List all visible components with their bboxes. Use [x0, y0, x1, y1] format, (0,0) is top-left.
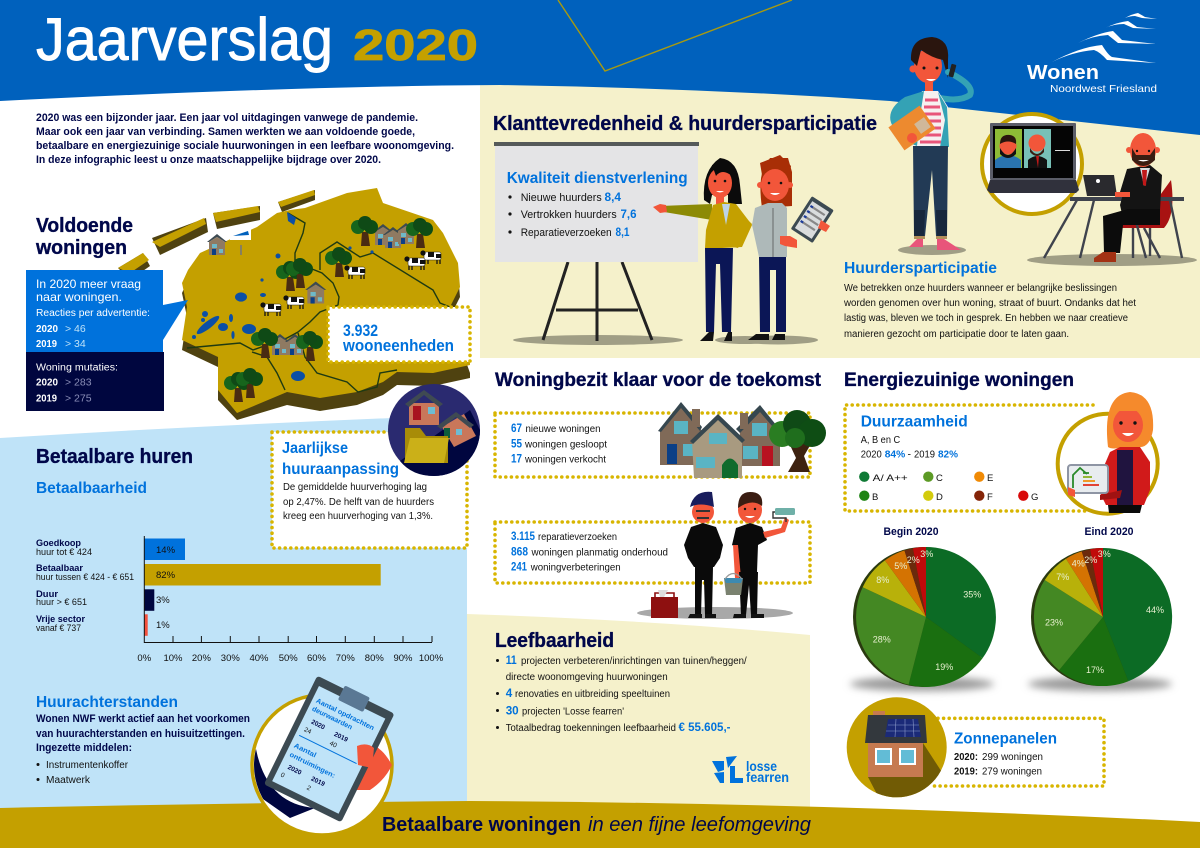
icon: house with solar panels — [846, 697, 947, 798]
bottom band: in een fijne leefomgeving — [588, 814, 811, 836]
callout: 3.932 wooneenheden: wooneenheden — [342, 336, 454, 355]
text: leefbaarheid: Leefbaarheid — [495, 630, 614, 652]
easel board: kwaliteit dienstverlening: Vertrokken huurders — [521, 209, 617, 221]
bar chart: betaalbaarheid: 10% — [163, 653, 183, 664]
text: leefbaarheid: 4 — [506, 686, 513, 700]
panel: reparaties statistieken: woningverbeteringen — [530, 562, 621, 574]
illustration: man at desk — [1027, 133, 1197, 266]
text: leefbaarheid: € 55.605,- — [678, 720, 730, 734]
text: huurdersparticipatie: manieren gezocht om participatie door te laten gaan. — [844, 329, 1069, 340]
illustration: presenting woman — [653, 158, 775, 344]
panel: reparaties statistieken: reparatieverzoeken — [538, 532, 617, 543]
text: huurdersparticipatie: We betrekken onze huurders wanneer er belangrijke beslissingen — [844, 283, 1117, 294]
pie chart: begin 2020: 3% — [920, 549, 933, 559]
bar chart: betaalbaarheid: 100% — [419, 653, 444, 664]
pie chart: eind 2020: 3% — [1098, 549, 1111, 559]
bar chart: betaalbaarheid: Duur — [36, 589, 58, 600]
panel: woningen statistieken: nieuwe woningen — [526, 424, 600, 435]
legend: energielabels: E — [987, 473, 993, 484]
header band — [0, 0, 1200, 135]
text: leefbaarheid: directe woonomgeving huurwoningen — [506, 672, 668, 683]
easel board: kwaliteit dienstverlening: Reparatieverzoeken — [521, 227, 612, 239]
bar chart: betaalbaarheid: 1% — [156, 620, 170, 631]
bar chart: betaalbaarheid — [36, 536, 444, 664]
logo: Losse fearren — [712, 756, 789, 785]
callout: meer vraag naar woningen: 2019 — [36, 339, 57, 350]
heading: Voldoende woningen — [35, 215, 133, 259]
bar chart: betaalbaarheid: Goedkoop — [36, 538, 81, 549]
clipboard: deurwaarden en ontruimingen: ontruimingen: — [288, 751, 336, 780]
panel: duurzaamheid: 84% — [885, 448, 906, 460]
clipboard: deurwaarden en ontruimingen: Aantal — [293, 743, 317, 759]
text: leefbaarheid: 30 — [506, 704, 519, 718]
bar chart: betaalbaarheid: 3% — [156, 595, 170, 606]
intro text — [36, 112, 454, 166]
bar chart: betaalbaarheid: 70% — [336, 653, 355, 664]
panel: reparaties statistieken — [495, 522, 810, 583]
easel board: kwaliteit dienstverlening: 7,6 — [620, 207, 637, 221]
bar chart: betaalbaarheid: vanaf € 737 — [36, 623, 81, 634]
callout: woning mutaties: 2020 — [36, 378, 58, 388]
bottom band: Betaalbare woningen — [382, 814, 581, 836]
pie chart: eind 2020: 17% — [1086, 665, 1104, 675]
clipboard: deurwaarden en ontruimingen: 0 — [279, 772, 286, 780]
text: huurdersparticipatie: lastig was, bleven we toch in gesprek. En hebben we naar creatieve — [844, 313, 1128, 324]
logo: Wonen Noordwest Friesland — [1027, 13, 1157, 95]
legend: energielabels: B — [872, 492, 878, 503]
callout: meer vraag naar woningen: > 46 — [65, 323, 86, 335]
panel: duurzaamheid: A, B en C — [861, 435, 900, 446]
illustration: video call laptop — [982, 114, 1082, 214]
legend: energielabels — [859, 472, 1038, 503]
clipboard: deurwaarden en ontruimingen: 2019 — [310, 775, 326, 788]
bottom band — [0, 801, 1200, 848]
bar chart: betaalbaarheid: 80% — [365, 653, 384, 664]
text: leefbaarheid — [495, 630, 747, 734]
panel: duurzaamheid: Duurzaamheid — [861, 414, 968, 431]
panel: reparaties statistieken: woningen planmatig onderhoud — [531, 548, 668, 558]
panel: zonnepanelen: 299 woningen — [982, 751, 1043, 763]
logo: Losse fearren: losse — [746, 758, 777, 774]
easel board: kwaliteit dienstverlening: 8,1 — [616, 225, 630, 239]
heading: Betaalbare huren: Betaalbaarheid — [36, 480, 147, 497]
map of Noordwest Friesland — [118, 188, 470, 420]
panel: duurzaamheid: - — [908, 448, 912, 460]
logo: Losse fearren: fearren — [746, 769, 789, 785]
heading: klanttevredenheid en huurdersparticipatie: Klanttevredenheid & huurdersparticipatie — [493, 113, 877, 135]
heading: Voldoende woningen: woningen — [35, 237, 127, 259]
panel: woningen statistieken: 17 — [511, 454, 522, 466]
pie chart: begin 2020: 19% — [935, 662, 953, 672]
panel: woningen statistieken: 55 — [511, 438, 523, 450]
callout: meer vraag naar woningen: naar woningen. — [36, 290, 122, 304]
illustration: three houses and tree — [658, 402, 781, 478]
panel: woningen statistieken: woningen gesloopt — [524, 440, 607, 450]
intro text: 2020 was een bijzonder jaar. Een jaar vol uitdagingen vanwege de pandemie. — [36, 112, 418, 124]
callout: meer vraag naar woningen: Reacties per advertentie: — [36, 308, 150, 319]
easel board: kwaliteit dienstverlening: 8,4 — [604, 190, 621, 204]
callout: 3.932 wooneenheden: 3.932 — [343, 321, 378, 340]
bar chart: betaalbaarheid: 40% — [249, 653, 269, 664]
callout: jaarlijkse huuraanpassing — [272, 432, 467, 548]
callout: jaarlijkse huuraanpassing: op 2,47%. De helft van de huurders — [283, 497, 434, 508]
text: huurachterstanden: van huurachterstanden en huisuitzettingen. — [36, 728, 245, 740]
text: huurachterstanden: Instrumentenkoffer — [46, 760, 129, 771]
heading: energiezuinige woningen: Energiezuinige woningen — [844, 370, 1074, 391]
clipboard: deurwaarden en ontruimingen: 40 — [328, 740, 338, 750]
illustration: woman on phone with book — [888, 37, 971, 255]
illustration: two workmen — [637, 492, 795, 619]
panel: reparaties statistieken: 868 — [511, 546, 529, 558]
legend: energielabels: D — [936, 492, 943, 503]
clipboard: deurwaarden en ontruimingen — [250, 673, 396, 835]
pie chart: eind 2020: 44% — [1146, 605, 1164, 615]
legend: energielabels: G — [1031, 492, 1038, 503]
bar chart: betaalbaarheid: huur tussen € 424 - € 651 — [36, 572, 134, 583]
panel: woningen statistieken: woningen verkocht — [524, 454, 606, 466]
bar chart: betaalbaarheid: 30% — [221, 653, 240, 664]
title: 2020 — [353, 21, 478, 70]
panel: duurzaamheid: 82% — [938, 448, 959, 460]
bar chart: betaalbaarheid: 60% — [307, 653, 327, 664]
clipboard: deurwaarden en ontruimingen: deurwaarden — [311, 706, 353, 731]
panel: zonnepanelen: 2020: — [954, 751, 978, 763]
callout: meer vraag naar woningen — [26, 270, 188, 352]
intro text: betaalbare en energiezuinige sociale huurwoningen in een leefbare woonomgeving. — [36, 140, 454, 152]
clipboard: deurwaarden en ontruimingen: Aantal opdrachten — [315, 698, 375, 732]
pie chart: begin 2020: 35% — [963, 590, 981, 600]
pie chart: eind 2020 — [1028, 548, 1172, 691]
callout: jaarlijkse huuraanpassing: kreeg een huurverhoging van 1,3%. — [283, 511, 433, 522]
panel: duurzaamheid: 2019 — [914, 448, 935, 460]
panel: woningen statistieken: 67 — [511, 423, 522, 435]
text: leefbaarheid: projecten verbeteren/inrichtingen van tuinen/heggen/ — [521, 656, 747, 667]
callout: woning mutaties: Woning mutaties: — [36, 362, 118, 374]
pie chart: eind 2020: 2% — [1084, 555, 1097, 565]
heading: woningbezit: Woningbezit klaar voor de toekomst — [495, 370, 822, 391]
panel: zonnepanelen: 2019: — [954, 766, 978, 778]
bar chart: betaalbaarheid: 14% — [156, 545, 176, 556]
pie chart: begin 2020: 5% — [894, 561, 907, 571]
panel: zonnepanelen: 279 woningen — [982, 766, 1042, 778]
illustration: woman with energy label tablet — [1058, 392, 1158, 514]
icon: houses in folder — [388, 384, 480, 476]
pie chart: eind 2020: 23% — [1045, 618, 1063, 628]
callout: jaarlijkse huuraanpassing: Jaarlijkse — [282, 440, 348, 457]
legend: energielabels: F — [987, 492, 993, 503]
logo: Wonen Noordwest Friesland: Wonen — [1027, 62, 1099, 84]
text: leefbaarheid: 11 — [506, 653, 517, 667]
clipboard: deurwaarden en ontruimingen: 2020 — [310, 719, 326, 732]
text: huurachterstanden — [36, 694, 250, 786]
heading: eind 2020: Eind 2020 — [1084, 526, 1134, 538]
text: huurachterstanden: Maatwerk — [46, 775, 91, 786]
text: huurachterstanden: Ingezette middelen: — [36, 742, 132, 754]
panel: duurzaamheid — [845, 405, 1093, 511]
pie chart: begin 2020: 28% — [873, 634, 891, 644]
panel: zonnepanelen: Zonnepanelen — [954, 730, 1057, 747]
legend: energielabels: C — [936, 473, 943, 484]
easel board: kwaliteit dienstverlening — [494, 142, 699, 345]
bar chart: betaalbaarheid: 82% — [156, 570, 176, 581]
text: huurdersparticipatie: worden genomen over hun woning, straat of buurt. Ondanks dat het — [843, 298, 1136, 309]
legend: energielabels: A/ A++ — [873, 473, 908, 484]
callout: meer vraag naar woningen: > 34 — [65, 338, 86, 350]
bar chart: betaalbaarheid: 50% — [279, 653, 298, 664]
text: huurdersparticipatie: Huurdersparticipatie — [844, 260, 997, 277]
panel: reparaties statistieken: 241 — [511, 562, 528, 574]
pie chart: begin 2020: 8% — [876, 575, 889, 585]
clipboard: deurwaarden en ontruimingen: 2019 — [333, 731, 349, 744]
panel: reparaties statistieken: 3.115 — [511, 531, 536, 543]
clipboard: deurwaarden en ontruimingen: 2020 — [286, 764, 303, 777]
clipboard: deurwaarden en ontruimingen: 24 — [303, 726, 313, 736]
intro text: In deze infographic leest u onze maatschappelijke bijdrage over 2020. — [36, 154, 381, 166]
title: Jaarverslag — [36, 6, 333, 73]
panel: woningen statistieken — [495, 413, 810, 477]
easel board: kwaliteit dienstverlening: Nieuwe huurders — [521, 192, 602, 204]
bar chart: betaalbaarheid: huur > € 651 — [36, 597, 87, 608]
heading: Betaalbare huren — [36, 446, 193, 497]
bar chart: betaalbaarheid: Vrije sector — [36, 614, 85, 625]
bar chart: betaalbaarheid: 90% — [393, 653, 413, 664]
text: huurdersparticipatie — [843, 260, 1136, 340]
callout: woning mutaties: > 283 — [65, 376, 92, 388]
text: leefbaarheid: Totaalbedrag toekenningen leefbaarheid — [506, 723, 676, 734]
text: huurachterstanden: Huurachterstanden — [36, 694, 178, 711]
intro text: Maar ook een jaar van verbinding. Samen werkten we aan voldoende goede, — [36, 126, 415, 138]
clipboard: deurwaarden en ontruimingen: 2 — [305, 784, 312, 793]
panel: zonnepanelen — [931, 718, 1104, 786]
heading: Voldoende woningen: Voldoende — [36, 215, 133, 237]
text: huurachterstanden: Wonen NWF werkt actief aan het voorkomen — [36, 713, 250, 725]
callout: meer vraag naar woningen: In 2020 meer vraag — [36, 277, 141, 291]
illustration: man with checklist — [738, 155, 834, 344]
bar chart: betaalbaarheid: 0% — [137, 653, 152, 664]
logo: Wonen Noordwest Friesland: Noordwest Friesland — [1050, 83, 1157, 95]
heading: Betaalbare huren: Betaalbare huren — [36, 446, 193, 468]
pie chart: begin 2020: 2% — [907, 555, 920, 565]
callout: woning mutaties — [26, 352, 164, 411]
pie chart: begin 2020 — [850, 547, 996, 691]
bar chart: betaalbaarheid: 20% — [192, 653, 211, 664]
bar chart: betaalbaarheid: huur tot € 424 — [36, 547, 92, 558]
easel board: kwaliteit dienstverlening: Kwaliteit dienstverlening — [507, 170, 688, 187]
callout: jaarlijkse huuraanpassing: huuraanpassing — [282, 461, 399, 478]
illustration: tree — [769, 410, 826, 472]
panel: duurzaamheid: 2020 — [861, 448, 882, 460]
callout: 3.932 wooneenheden — [328, 307, 470, 362]
bar chart: betaalbaarheid: Betaalbaar — [36, 563, 83, 574]
text: leefbaarheid: renovaties en uitbreiding speeltuinen — [515, 689, 670, 700]
callout: woning mutaties: > 275 — [65, 392, 92, 404]
callout: jaarlijkse huuraanpassing: De gemiddelde huurverhoging lag — [283, 482, 427, 493]
heading: begin 2020: Begin 2020 — [884, 526, 938, 538]
pie chart: eind 2020: 4% — [1072, 558, 1085, 568]
callout: meer vraag naar woningen: 2020 — [36, 324, 58, 335]
callout: woning mutaties: 2019 — [36, 394, 57, 404]
text: leefbaarheid: projecten 'Losse fearren' — [522, 706, 624, 718]
pie chart: eind 2020: 7% — [1056, 572, 1069, 582]
